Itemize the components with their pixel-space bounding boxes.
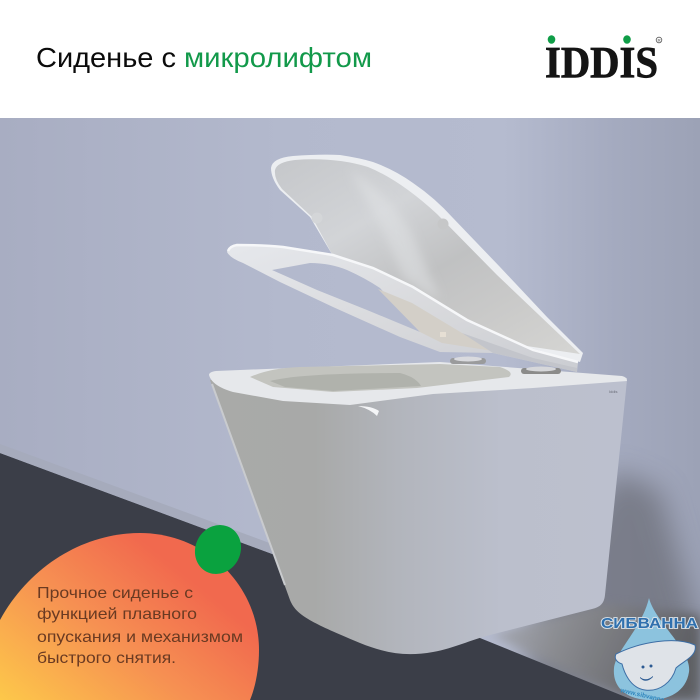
- photo: toilet body: [210, 362, 627, 654]
- photo: seat: [227, 245, 578, 372]
- logo: IDDIS: IDDIS: [545, 38, 658, 87]
- photo: seat hinge band shade: [462, 333, 577, 372]
- photo: skirting line: [0, 444, 275, 555]
- lid light reflection: [350, 170, 440, 300]
- description text: функцией плавного: [37, 606, 197, 623]
- photo: bowl interior: [250, 364, 511, 392]
- watermark drop: [614, 598, 689, 700]
- photo: wall below toilet: [490, 604, 700, 700]
- lid inner face: [275, 159, 580, 354]
- description text: Прочное сиденье с: [37, 585, 193, 602]
- title: Сиденье с: [36, 42, 176, 73]
- watermark name: СИБВАННА: [601, 615, 698, 632]
- watermark face: [640, 664, 653, 681]
- photo: brand mark on toilet: Iddis: [609, 389, 617, 394]
- title: микролифтом: [184, 42, 372, 73]
- photo: lid: [271, 155, 583, 362]
- logo: IDDIS: R: [658, 38, 662, 43]
- header background: [0, 0, 700, 118]
- photo: seat white edge: [228, 245, 578, 362]
- photo: bowl water: [270, 373, 421, 391]
- photo: hinges: [450, 356, 561, 374]
- watermark bathtub: [615, 641, 695, 690]
- watermark: Sibvanna: [601, 598, 698, 700]
- description text: быстрого снятия.: [37, 650, 176, 667]
- photo: toilet rim: [209, 362, 627, 405]
- photo: body highlight: [358, 406, 379, 416]
- description text: опускания и механизмом: [37, 629, 243, 646]
- photo: seat underside: [378, 289, 493, 351]
- photo: floor: [0, 453, 633, 700]
- orange circle panel: [0, 533, 259, 700]
- description text: [37, 585, 243, 667]
- photo: body left edge highlight: [212, 384, 285, 585]
- photo: wall shadow beside toilet: [520, 470, 700, 700]
- green blob: [186, 517, 250, 582]
- photo: seat bumper: [440, 332, 446, 337]
- lid buffers: [312, 212, 322, 224]
